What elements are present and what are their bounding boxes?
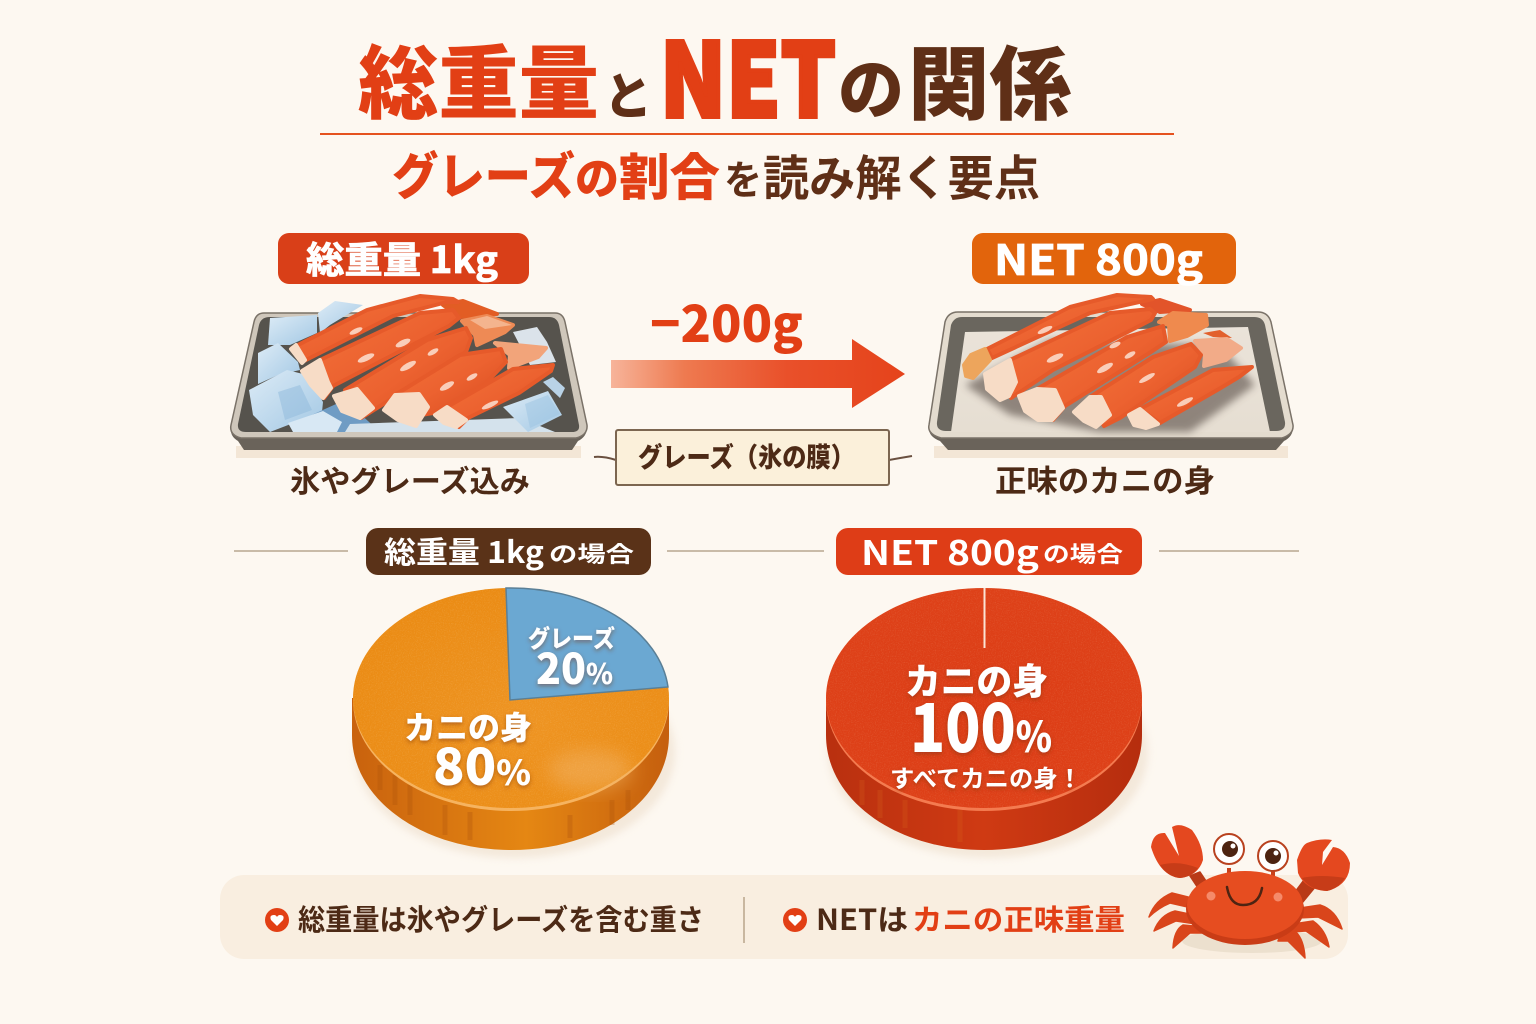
- pie chart: total weight: [352, 588, 675, 858]
- title: 関係: [908, 21, 1071, 137]
- pie label: 100 percent: カニの身: [905, 653, 1048, 705]
- badge: 1kg case: の場合: [549, 537, 634, 569]
- title: NET: [660, 0, 836, 147]
- badge: 800g case: [836, 526, 1142, 575]
- illustration: tray with crab legs only: [929, 295, 1293, 458]
- section rules: [234, 550, 1299, 552]
- pie label: glaze: グレーズ: [528, 619, 615, 654]
- summary text: net: NETは: [816, 897, 908, 939]
- pie chart: net weight: [826, 588, 1148, 858]
- subtitle: 割合: [619, 138, 720, 210]
- pie label: 100 percent: [890, 653, 1082, 794]
- summary text: net: カニの正味重量: [912, 897, 1125, 939]
- badge: 1kg case: 総重量 1kg: [384, 528, 544, 572]
- title: [358, 0, 1071, 147]
- arrow: [611, 339, 905, 408]
- pie slice: glaze: [506, 588, 668, 700]
- caption: crab meat only: 正味のカニの身: [995, 456, 1215, 501]
- summary bar: [220, 875, 1348, 959]
- minus 200g label: −200g: [650, 285, 803, 357]
- pie label: 100 percent: 100%: [910, 676, 1052, 772]
- badge: 800g case: NET 800g: [861, 526, 1039, 575]
- summary text: total weight: 総重量は氷やグレーズを含む重さ: [298, 897, 704, 939]
- badge: net weight: NET 800g: [994, 227, 1203, 288]
- summary text: net: [816, 897, 1125, 939]
- badge: total weight: 総重量 1kg: [306, 230, 498, 284]
- title: と: [604, 57, 652, 129]
- illustration: tray with ice and crab legs: [231, 296, 587, 458]
- crab eyes: [1214, 834, 1288, 871]
- ice cubes: [249, 301, 565, 432]
- crab legs: [1149, 868, 1342, 958]
- badge: 800g case: の場合: [1043, 537, 1123, 569]
- title divider: [320, 133, 1174, 135]
- pie label: crab meat: [404, 703, 532, 800]
- subtitle: を: [724, 148, 762, 206]
- pie label: crab meat: カニの身: [404, 703, 532, 749]
- subtitle: 読み解く要点: [763, 139, 1040, 209]
- crab legs: [291, 296, 553, 427]
- title: の: [838, 37, 904, 133]
- callout: glaze: [594, 430, 912, 485]
- subtitle: の: [575, 143, 619, 207]
- pie label: 100 percent: すべてカニの身！: [890, 759, 1082, 794]
- crab claws: [1151, 825, 1350, 891]
- crab body: [1186, 873, 1304, 945]
- crab legs: [964, 295, 1252, 428]
- icon: heart left: [265, 908, 289, 932]
- icon: heart right: [783, 908, 807, 932]
- pie label: glaze: 20%: [536, 636, 613, 697]
- subtitle: [392, 137, 1040, 210]
- pie label: glaze: [528, 619, 615, 697]
- subtitle: グレーズ: [392, 137, 575, 209]
- badge: 1kg case: [366, 528, 651, 575]
- callout: glaze: グレーズ（氷の膜）: [638, 436, 855, 475]
- caption: with ice: 氷やグレーズ込み: [290, 457, 530, 501]
- title: 総重量: [358, 20, 599, 136]
- crab mascot: [1149, 825, 1350, 958]
- pie label: crab meat: 80%: [433, 728, 531, 800]
